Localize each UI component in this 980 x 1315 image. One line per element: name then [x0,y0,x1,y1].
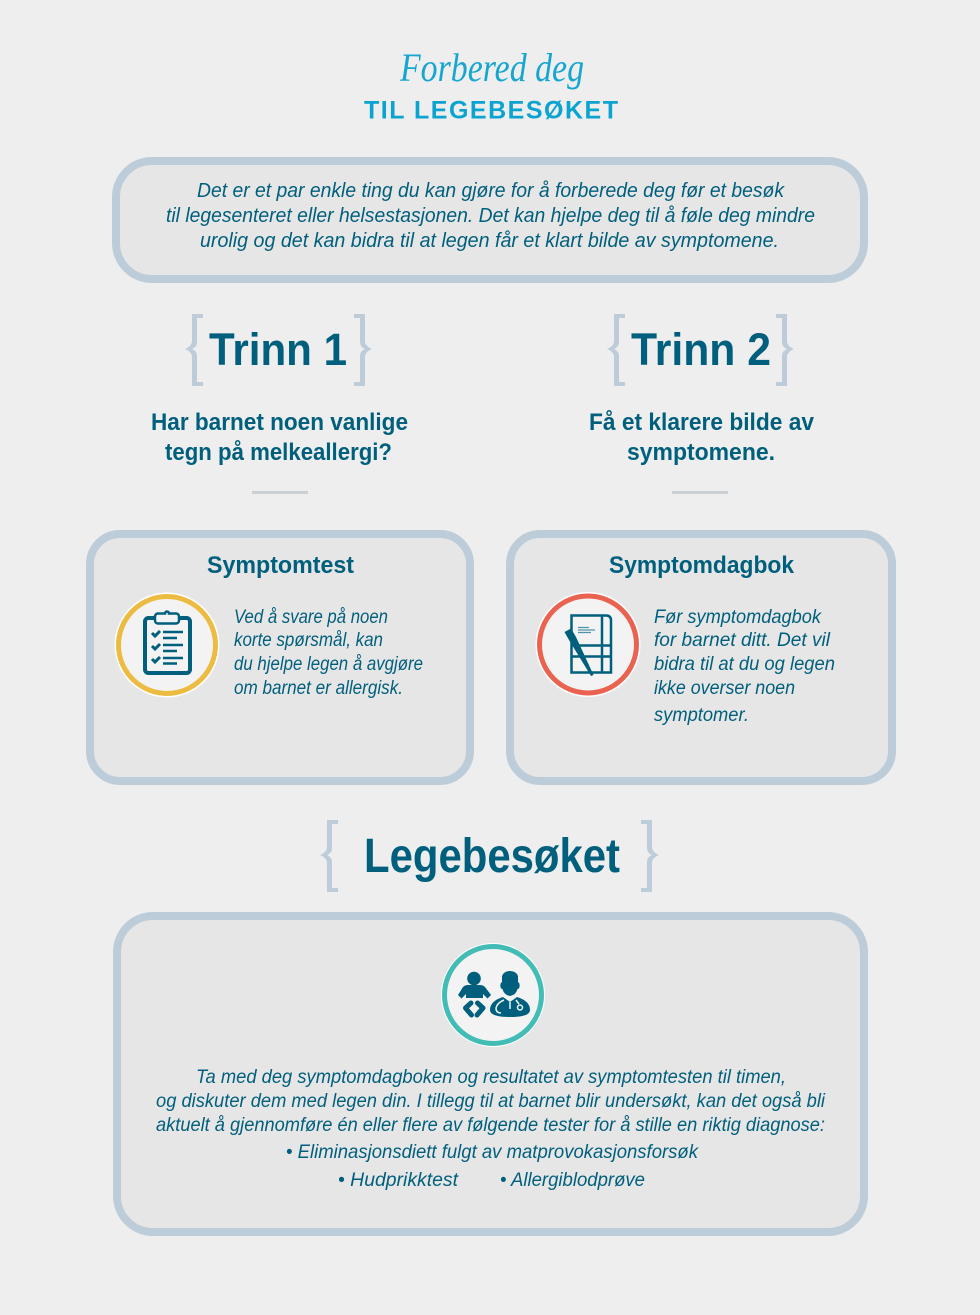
panel: Symptomdagbok: bidra til at du og legen [654,654,835,675]
panel: Symptomdagbok: ikke overser noen [654,678,795,699]
heading: Trinn 1 [185,314,372,386]
panel: Symptomdagbok: Før symptomdagbok [654,607,822,628]
text: step 2 question [589,409,815,466]
panel: intro: urolig og det kan bidra til at legen får et klart bilde av symptomene. [200,230,779,252]
panel: intro: Det er et par enkle ting du kan gjøre for å forberede deg før et besøk [197,180,785,202]
panel: Symptomtest: om barnet er allergisk. [234,678,403,699]
heading: Trinn 1: Trinn 1 [209,324,347,375]
text: step 1 question [151,409,408,466]
text: step 1 question: Har barnet noen vanlige [151,409,408,436]
panel: Symptomtest: Symptomtest [207,552,354,579]
panel: Symptomdagbok [510,534,892,781]
title [364,45,618,124]
panel: Symptomdagbok: symptomer. [654,705,749,726]
panel: Symptomtest: du hjelpe legen å avgjøre [234,654,423,675]
icon: notebook and pen [536,592,640,697]
panel: doctor visit: • Allergiblodprøve [500,1170,645,1191]
heading: Legebesøket [320,820,659,892]
panel: intro: til legesenteret eller helsestasjonen. Det kan hjelpe deg til å føle deg mindre [166,205,815,227]
panel: doctor visit: aktuelt å gjennomføre én eller flere av følgende tester for å stille en riktig diagnose: [156,1115,825,1136]
heading: Trinn 2: Trinn 2 [631,324,771,375]
icon: clipboard [114,592,220,698]
text: step 2 question: symptomene. [627,439,775,466]
title: TIL LEGEBESØKET [364,96,618,124]
icon: baby and doctor [441,943,545,1047]
panel: intro [116,161,864,279]
heading: Trinn 2 [607,314,794,386]
panel: Symptomdagbok: for barnet ditt. Det vil [654,630,831,651]
panel: doctor visit [117,916,864,1232]
text: step 2 question: Få et klarere bilde av [589,409,815,436]
text: step 1 question: tegn på melkeallergi? [165,439,392,466]
panel: doctor visit: og diskuter dem med legen din. I tillegg til at barnet blir undersøkt, kan det også bli [156,1091,826,1112]
heading: Legebesøket: Legebesøket [364,830,620,883]
title: Forbered deg [399,45,584,90]
panel: Symptomtest: korte spørsmål, kan [234,630,383,651]
panel: doctor visit: • Hudprikktest [338,1170,459,1191]
panel: doctor visit: • Eliminasjonsdiett fulgt av matprovokasjonsforsøk [286,1142,699,1163]
panel: doctor visit: Ta med deg symptomdagboken og resultatet av symptomtesten til timen, [196,1067,786,1088]
panel: Symptomtest [90,534,470,781]
panel: Symptomtest: Ved å svare på noen [234,607,388,628]
panel: Symptomdagbok: Symptomdagbok [609,552,795,579]
